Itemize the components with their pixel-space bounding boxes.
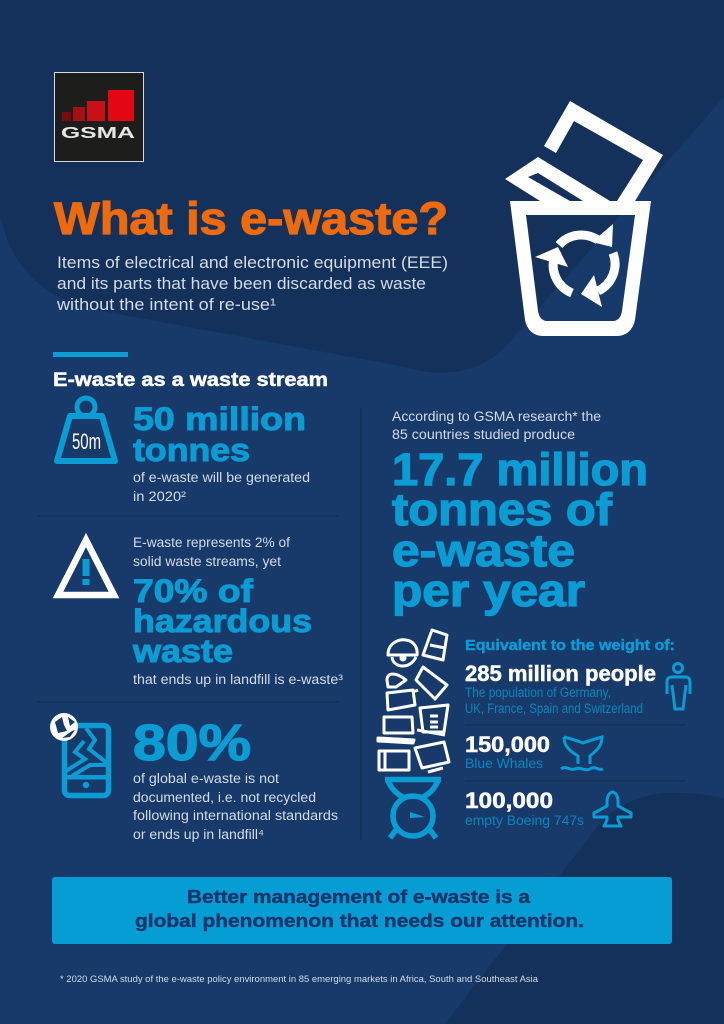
equivalent: 285 million people [465, 661, 656, 716]
stat: 80%: 80% [133, 714, 251, 771]
equivalent: 285 million people: UK, France, Spain and Switzerland [465, 701, 643, 716]
equivalent: 100,000 Boeing 747s: 100,000 [465, 788, 553, 813]
stat: 80% [133, 714, 338, 842]
stat: 50 million tonnes [133, 401, 310, 504]
logo: GSMA: GSMA [61, 125, 135, 142]
icon: broken phone and globe [50, 713, 109, 796]
stat: 50 million tonnes: of e-waste will be generated [133, 470, 310, 485]
callout banner: Better management of e-waste is a [187, 886, 531, 907]
callout banner [52, 877, 672, 944]
stat: 70% of hazardous waste: 70% of [133, 573, 253, 609]
stat: 17.7 million tonnes per year: e-waste [392, 525, 575, 576]
icon: person [667, 664, 690, 709]
equivalent: 100,000 Boeing 747s [465, 788, 584, 828]
equivalent: 150,000 blue whales: 150,000 [465, 732, 550, 757]
stat: 70% of hazardous waste: E-waste represents 2% of [133, 535, 290, 550]
logo: GSMA [54, 72, 144, 162]
equivalents heading: Equivalent to the weight of: [465, 638, 675, 654]
equivalent: 150,000 blue whales: Blue Whales [465, 756, 543, 771]
stat: 17.7 million tonnes per year: tonnes of [392, 484, 613, 535]
stat: 70% of hazardous waste: hazardous [133, 603, 312, 639]
icon: plane [594, 792, 631, 826]
intro text [56, 253, 448, 314]
stat: 50 million tonnes: in 2020² [133, 489, 187, 504]
stat: 50 million tonnes: 50 million [133, 401, 306, 437]
stat: 50 million tonnes: tonnes [133, 432, 250, 468]
stat: 80%: of global e-waste is not [133, 771, 279, 786]
icon: 50m weight [57, 398, 115, 461]
icon: recycling bin [505, 101, 663, 336]
stat: 17.7 million tonnes per year: 17.7 million [392, 444, 648, 495]
stat: 70% of hazardous waste: waste [132, 633, 233, 669]
stat: 70% of hazardous waste: solid waste streams, yet [133, 554, 281, 569]
title: What is e-waste? [54, 193, 448, 244]
intro text: Items of electrical and electronic equipment (EEE) [57, 253, 448, 272]
stat: 70% of hazardous waste: that ends up in landfill is e-waste³ [133, 672, 344, 687]
section accent bar [53, 352, 128, 357]
callout banner: global phenomenon that needs our attention. [135, 910, 584, 931]
stat: 17.7 million tonnes per year: 85 countries studied produce [392, 427, 575, 442]
stat: 17.7 million tonnes per year [392, 409, 648, 616]
section heading: E-waste as a waste stream [53, 370, 328, 391]
intro text: without the intent of re-use¹ [56, 295, 276, 314]
stat: 80%: documented, i.e. not recycled [133, 790, 316, 805]
stat: 17.7 million tonnes per year: per year [392, 565, 585, 616]
stat: 70% of hazardous waste [132, 535, 344, 687]
icon: devices on a scale [378, 630, 449, 838]
icon: whale tail [561, 737, 603, 770]
equivalent: 150,000 blue whales [465, 732, 550, 771]
stat: 80%: or ends up in landfill⁴ [133, 827, 264, 842]
icon: 50m weight: 50m [72, 429, 101, 454]
equivalent: 285 million people: The population of Germany, [465, 685, 611, 700]
stat: 80%: following international standards [133, 808, 338, 823]
stat: 17.7 million tonnes per year: According to GSMA research* the [392, 409, 601, 424]
equivalent: 100,000 Boeing 747s: empty Boeing 747s [465, 813, 584, 828]
footnote: * 2020 GSMA study of the e-waste policy environment in 85 emerging markets in Africa, South and Southeast Asia [60, 974, 539, 985]
intro text: and its parts that have been discarded as waste [57, 274, 426, 293]
icon: hazard triangle [58, 540, 114, 595]
equivalent: 285 million people: 285 million people [465, 661, 656, 686]
